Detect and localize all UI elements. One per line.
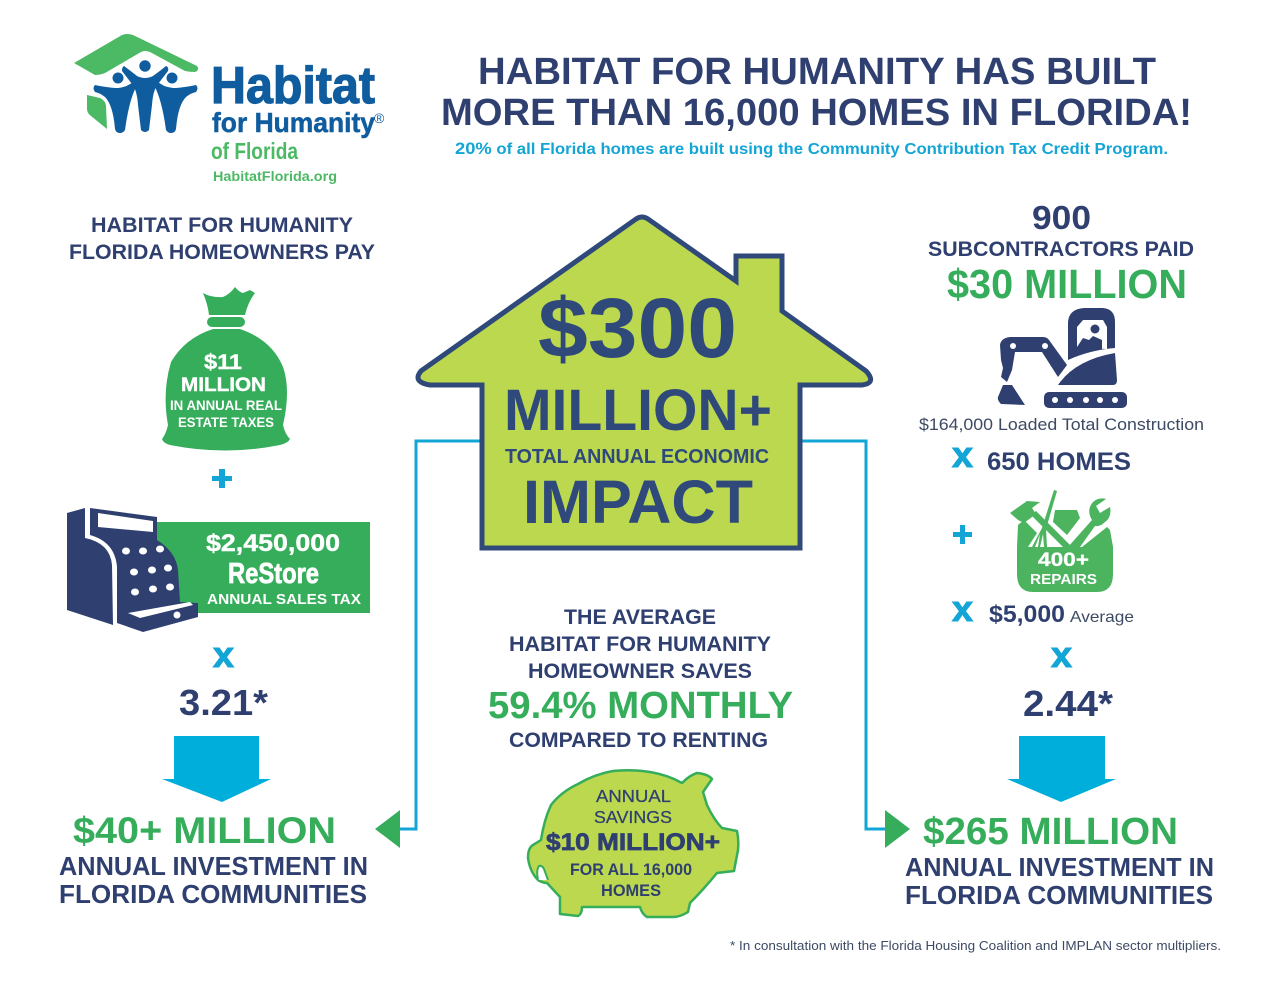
text: loaded total construction: $164,000 Loaded Total Construction [919, 416, 1204, 434]
panel: homeowner saves: COMPARED TO RENTING [509, 729, 768, 752]
icon: money bag with real estate taxes: IN ANNUAL REAL [170, 397, 282, 413]
subtitle: 20% of all Florida homes are built using the Community Contribution Tax Credit Program. [455, 139, 1168, 158]
connector arrow: house to right total [800, 441, 910, 848]
icon: toolbox 400+ repairs: 400+ [1038, 550, 1089, 571]
heading: subcontractors paid: $30 MILLION [947, 261, 1187, 307]
side wedges [1017, 520, 1037, 547]
title: MORE THAN 16,000 HOMES IN FLORIDA! [441, 92, 1192, 134]
body [1058, 353, 1117, 385]
icon: piggy bank annual savings: $10 MILLION+ [546, 829, 720, 856]
right total investment: ANNUAL INVESTMENT IN [905, 852, 1214, 882]
logo: Habitat for Humanity of Florida: of Florida [211, 138, 298, 164]
title: HABITAT FOR HUMANITY HAS BUILT [478, 51, 1156, 93]
house shape [418, 217, 871, 548]
icon: piggy bank annual savings: ANNUAL [596, 786, 671, 806]
hammer handle [1031, 511, 1072, 547]
multiply sign: x [1051, 634, 1072, 675]
left total investment [59, 810, 368, 909]
panel: homeowner saves [488, 606, 793, 752]
arrow: down right [1007, 736, 1116, 802]
hammer head [1010, 501, 1040, 523]
logo icon: roof and people [74, 34, 198, 133]
icon: excavator [998, 308, 1127, 408]
icon: money bag with real estate taxes: MILLION [181, 374, 266, 396]
left total investment: FLORIDA COMMUNITIES [59, 879, 367, 909]
arm [1000, 337, 1067, 382]
logo wordmark: Habitat [211, 57, 375, 115]
heading: subcontractors paid: SUBCONTRACTORS PAID [928, 238, 1194, 261]
icon: money bag with real estate taxes: ESTATE TAXES [178, 414, 274, 430]
multiply sign: x [213, 634, 234, 675]
multiply $5,000 average: $5,000 [989, 601, 1065, 628]
piggy tail [537, 866, 548, 880]
title [441, 51, 1192, 134]
centre block [1053, 510, 1080, 535]
logo: Habitat for Humanity of Florida: ® [374, 110, 385, 126]
multiply $5,000 average [952, 588, 1134, 629]
icon: piggy bank annual savings [528, 770, 738, 917]
panel: restore annual sales tax: ANNUAL SALES TAX [207, 591, 361, 608]
left total investment: $40+ MILLION [73, 810, 336, 851]
right total investment [905, 811, 1214, 910]
toolbox base [1017, 547, 1113, 592]
heading: homeowners pay: FLORIDA HOMEOWNERS PAY [69, 241, 375, 264]
million+: MILLION+ [504, 378, 772, 443]
cab [1068, 308, 1115, 360]
panel: homeowner saves: HOMEOWNER SAVES [528, 660, 752, 683]
right total investment: FLORIDA COMMUNITIES [905, 880, 1213, 910]
icon: cash register [67, 508, 198, 632]
left total investment: ANNUAL INVESTMENT IN [59, 851, 368, 881]
heading: homeowners pay [69, 214, 375, 264]
tracks [1044, 392, 1127, 408]
panel: homeowner saves: HABITAT FOR HUMANITY [509, 633, 771, 656]
arrow: down left [162, 736, 271, 802]
heading: subcontractors paid [928, 199, 1194, 307]
icon: piggy bank annual savings: SAVINGS [594, 807, 672, 827]
multiply $5,000 average: Average [1070, 609, 1134, 626]
logo: Habitat for Humanity of Florida [74, 34, 385, 184]
multiplier 3.21: 3.21* [179, 682, 268, 723]
panel: homeowner saves: THE AVERAGE [564, 606, 716, 629]
heading: subcontractors paid: 900 [1032, 199, 1091, 236]
panel: central house economic impact [418, 217, 871, 548]
total annual economic: TOTAL ANNUAL ECONOMIC [505, 446, 769, 468]
bucket [998, 385, 1025, 405]
panel: restore annual sales tax: $2,450,000 [206, 530, 340, 557]
multiply 650 homes [952, 434, 1131, 476]
icon: toolbox 400+ repairs [1010, 490, 1113, 592]
wrench [1068, 498, 1110, 547]
icon: money bag with real estate taxes: $11 [204, 351, 242, 374]
connector arrow: house to left total [375, 441, 482, 848]
panel: homeowner saves: 59.4% MONTHLY [488, 685, 793, 727]
screwdriver fork [1032, 490, 1057, 547]
footnote: * In consultation with the Florida Housing Coalition and IMPLAN sector multipliers. [730, 939, 1221, 953]
plus sign [212, 469, 232, 488]
impact: IMPACT [523, 468, 753, 536]
plus sign [953, 525, 972, 544]
multiplier 2.44: 2.44* [1023, 683, 1113, 724]
multiply 650 homes: 650 HOMES [987, 448, 1131, 476]
panel: restore annual sales tax: ReStore [228, 558, 319, 590]
heading: homeowners pay: HABITAT FOR HUMANITY [91, 214, 353, 237]
$300: $300 [538, 281, 737, 375]
right total investment: $265 MILLION [923, 811, 1178, 853]
icon: piggy bank annual savings: HOMES [601, 881, 661, 900]
logo: Habitat for Humanity of Florida: for Humanity [212, 107, 375, 138]
panel: restore annual sales tax [67, 508, 370, 632]
logo: Habitat for Humanity of Florida: HabitatFlorida.org [213, 169, 337, 184]
multiply $5,000 average: x [952, 588, 973, 629]
multiply 650 homes: x [952, 434, 973, 475]
icon: toolbox 400+ repairs: REPAIRS [1030, 572, 1097, 588]
icon: piggy bank annual savings: FOR ALL 16,000 [570, 860, 692, 879]
icon: money bag with real estate taxes [162, 287, 290, 450]
